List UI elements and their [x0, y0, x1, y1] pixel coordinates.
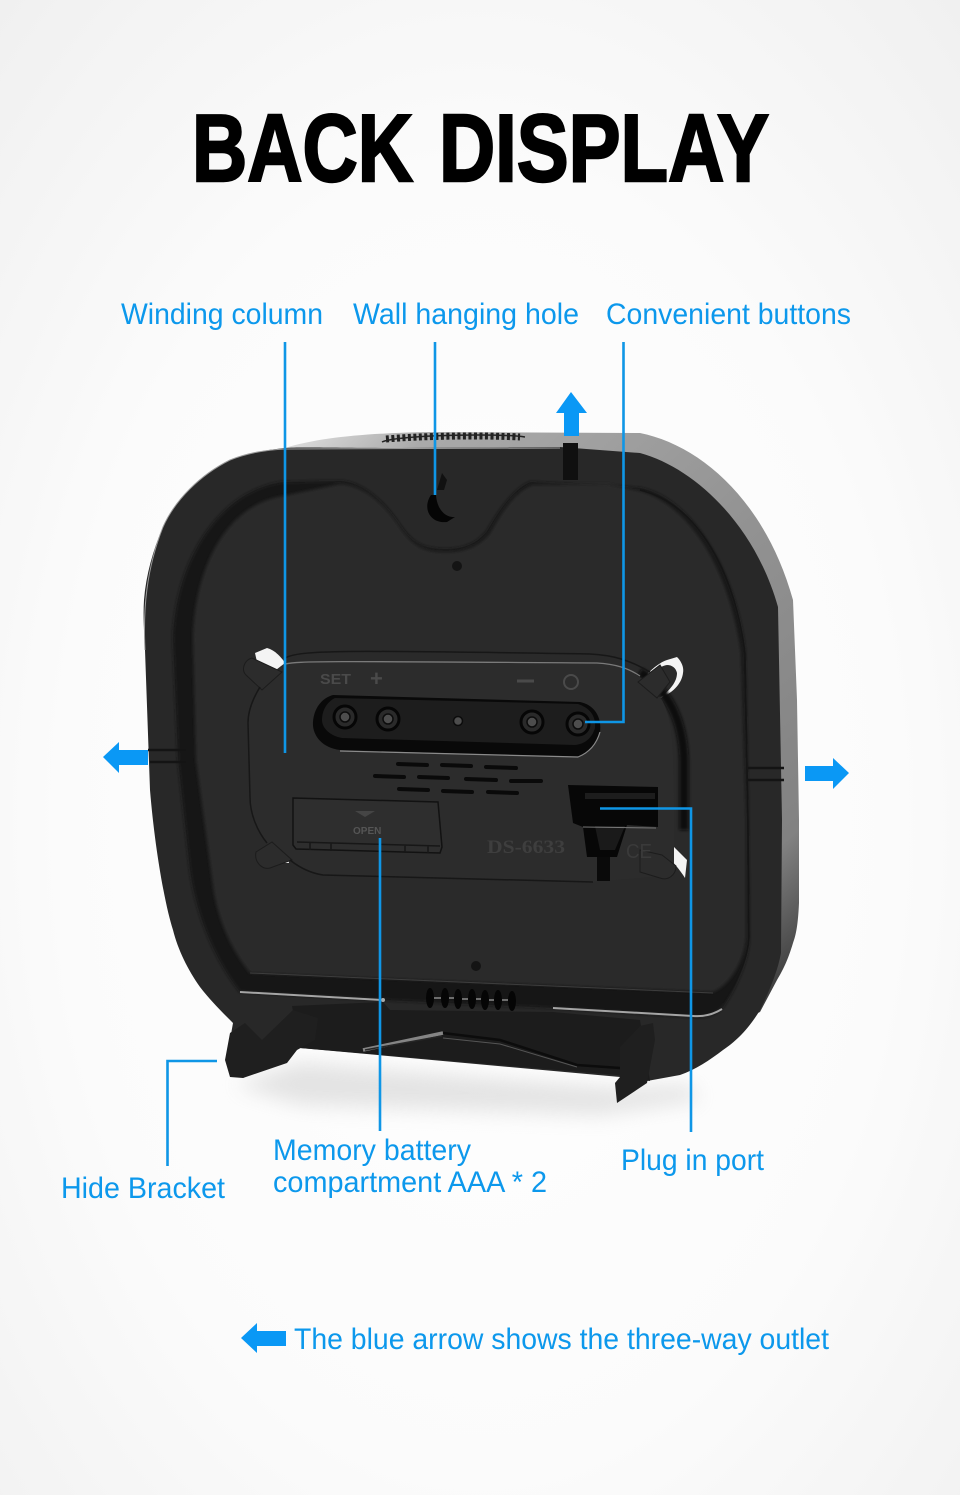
speaker slots	[375, 764, 541, 793]
grey side band	[285, 432, 799, 1040]
leader: plug in port	[600, 808, 691, 1132]
bracket groove	[363, 1033, 620, 1068]
hide bracket	[225, 988, 722, 1103]
leader: hide bracket	[168, 1061, 217, 1166]
title	[192, 95, 769, 202]
label: Winding column: Winding column	[121, 298, 323, 331]
arrow: left	[103, 742, 148, 773]
tray right line	[640, 490, 749, 1003]
movement module	[244, 648, 687, 882]
label: Hide Bracket: Hide Bracket	[61, 1172, 226, 1205]
label: Memory battery compartment	[273, 1134, 547, 1199]
tray bottom highlight	[250, 973, 713, 993]
title: BACK	[192, 95, 413, 202]
leader lines	[168, 342, 691, 1166]
plate outline	[248, 687, 593, 882]
title: DISPLAY	[439, 95, 769, 202]
legend text: The blue arrow shows the three-way outlet	[294, 1323, 830, 1356]
label: Wall hanging hole: Wall hanging hole	[353, 298, 579, 331]
battery cover label: OPEN	[353, 826, 381, 837]
label: Memory battery compartment: compartment AAA * 2	[273, 1166, 547, 1199]
clock back body	[144, 432, 799, 1081]
plate highlights	[285, 662, 640, 676]
tray ridge right	[553, 1008, 722, 1016]
left foot	[225, 1010, 318, 1078]
arrow: right	[805, 758, 849, 789]
leader: battery	[379, 838, 381, 1131]
battery cover	[293, 798, 442, 853]
white corner slots	[255, 648, 285, 673]
left side notch	[148, 750, 186, 762]
right foot	[615, 1023, 655, 1103]
tray ridge left	[240, 992, 383, 1000]
top clip	[563, 443, 578, 480]
arrow: up	[556, 392, 587, 436]
left edge highlight	[144, 448, 560, 650]
dark front shell	[144, 447, 782, 1081]
button labels: +	[370, 666, 383, 691]
label: Convenient buttons: Convenient buttons	[606, 298, 851, 331]
recess shadow right	[640, 672, 684, 830]
module plate	[248, 661, 674, 882]
model number: DS-6633	[487, 837, 565, 858]
leader: convenient buttons	[585, 342, 624, 722]
screw dimple top	[452, 561, 462, 571]
button labels: SET	[320, 671, 351, 688]
spring coil	[426, 988, 516, 1011]
wall hanging hole	[427, 473, 455, 522]
label: Memory battery compartment: Memory battery	[273, 1134, 471, 1167]
tray recess shadow	[173, 481, 749, 1017]
plug port	[568, 785, 658, 881]
button panel	[313, 695, 600, 757]
bracket bar	[292, 1002, 650, 1081]
leader: wall hanging hole	[434, 342, 436, 495]
right side notch	[748, 768, 784, 780]
dimple bottom	[471, 961, 481, 971]
arrow: legend	[241, 1323, 286, 1353]
leader: winding column	[284, 342, 286, 753]
button labels	[320, 666, 578, 691]
top vent	[382, 435, 525, 442]
CE mark: CE	[626, 841, 652, 863]
buttons	[334, 706, 589, 735]
right lower edge glint	[381, 998, 385, 1002]
plate lobes	[244, 658, 676, 879]
floor shadow	[235, 1062, 700, 1115]
label: Plug in port: Plug in port	[621, 1144, 765, 1177]
tray floor	[193, 484, 746, 992]
